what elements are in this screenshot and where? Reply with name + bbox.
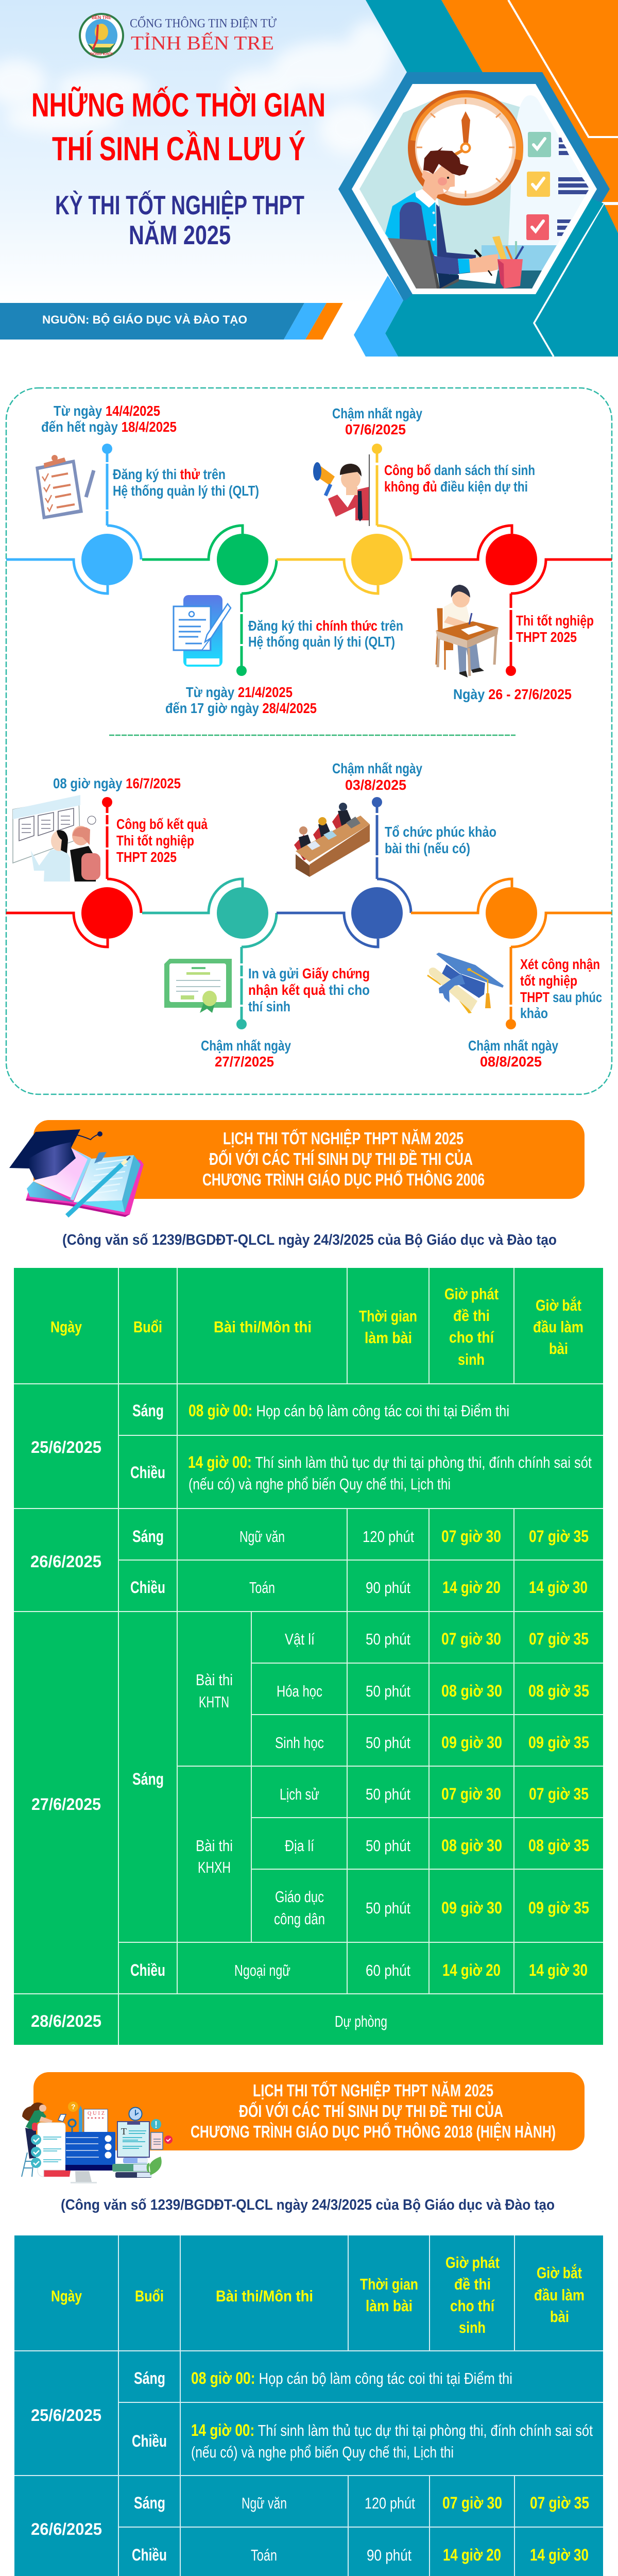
rows 25/6/2025 [31, 2369, 593, 2461]
timeline track: row 2 [6, 797, 612, 1029]
timeline track: row 1 [6, 444, 612, 676]
rows 27/6/2025: Chiều [130, 1961, 165, 1979]
milestone 7 text: bài thi (nếu có) [385, 840, 470, 856]
rows 27/6/2025: 07 giờ 30 [441, 1785, 501, 1803]
milestone 2 text: Hệ thống quản lý thi (QLT) [248, 634, 395, 650]
rows 26/6/2025: Ngữ văn [239, 1528, 285, 1546]
rows 26/6/2025: 14 giờ 20 [442, 1578, 501, 1597]
milestone 3 date: Chậm nhất ngày [332, 405, 422, 421]
milestone 5 text: Công bố kết quả [116, 816, 208, 832]
milestone circle 7 [351, 887, 403, 939]
rows 27/6/2025: 14 giờ 20 [442, 1961, 501, 1979]
table header: Ngày [51, 2287, 82, 2305]
rows 25/6/2025: 25/6/2025 [31, 1438, 101, 1456]
rows 27/6/2025: 50 phút [366, 1734, 410, 1752]
banner: ĐỐI VỚI CÁC THÍ SINH DỰ THI ĐỀ THI CỦA [209, 1149, 473, 1168]
title: NHỮNG MỐC THỜI GIAN [31, 86, 325, 124]
rows 27/6/2025: Bài thi [196, 1837, 233, 1855]
rows 27/6/2025: 27/6/2025 [31, 1795, 101, 1814]
table header: Ngày [50, 1318, 82, 1336]
rows 26/6/2025: Toán [249, 1579, 275, 1597]
title: THÍ SINH CẦN LƯU Ý [52, 130, 305, 167]
panel: header [0, 0, 618, 357]
rows 27/6/2025: KHTN [199, 1693, 229, 1711]
milestone 6 date [201, 1038, 291, 1070]
icon: review board panel [294, 803, 370, 877]
rows 27/6/2025: 14 giờ 30 [529, 1961, 588, 1979]
milestone circle 6 [217, 887, 268, 939]
table header: Giờ bắt [537, 2263, 582, 2282]
rows 27/6/2025: Giáo dục [275, 1888, 324, 1906]
rows 26/6/2025: 120 phút [363, 1528, 414, 1546]
milestone 8 text: khảo [520, 1005, 548, 1021]
milestone 8 text: tốt nghiệp [520, 973, 577, 989]
rows 25/6/2025 [31, 1401, 592, 1493]
banner [33, 2072, 585, 2150]
banner [33, 1120, 585, 1199]
milestone 3 date [332, 405, 422, 437]
milestone 3 text: Công bố danh sách thí sinh [384, 462, 535, 478]
milestone 4 text [516, 613, 594, 645]
milestone 2 date: đến 17 giờ ngày 28/4/2025 [165, 700, 317, 716]
milestone 3 date: 07/6/2025 [345, 421, 406, 437]
milestone circle 2 [217, 534, 268, 585]
rows 26/6/2025: Sáng [134, 2494, 165, 2512]
subtitle: KỲ THI TỐT NGHIỆP THPT [55, 190, 304, 221]
title [31, 86, 325, 167]
milestone circle 8 [486, 887, 537, 939]
rows 26/6/2025: Ngữ văn [242, 2494, 287, 2512]
icon: phone registration form [174, 595, 231, 667]
rows 27/6/2025: Địa lí [285, 1837, 314, 1855]
milestone 1 text [113, 466, 259, 499]
rows 26/6/2025: 120 phút [365, 2494, 415, 2512]
milestone 5 text: Thi tốt nghiệp [116, 833, 194, 849]
rows 26/6/2025: 14 giờ 30 [530, 2546, 589, 2564]
row 28/6/2025 [31, 2012, 387, 2030]
milestone 3 text [384, 462, 535, 495]
rows 27/6/2025: 09 giờ 35 [528, 1899, 589, 1917]
reference note: (Công văn số 1239/BGDĐT-QLCL ngày 24/3/2025 của Bộ Giáo dục và Đào tạo [62, 1232, 557, 1248]
logo: Cổng thông tin điện tử Bến Tre [79, 13, 124, 58]
rows 27/6/2025: Vật lí [285, 1630, 315, 1648]
banner: ĐỐI VỚI CÁC THÍ SINH DỰ THI ĐỀ THI CỦA [239, 2101, 503, 2121]
banner: CHƯƠNG TRÌNH GIÁO DỤC PHỔ THÔNG 2006 [202, 1170, 485, 1189]
milestone 8 date [468, 1038, 558, 1070]
table header: làm bài [365, 1329, 412, 1347]
table header: cho thí [449, 1328, 494, 1346]
banner: LỊCH THI TỐT NGHIỆP THPT NĂM 2025 [253, 2080, 493, 2100]
dashed frame [6, 388, 612, 1094]
rows 26/6/2025: 90 phút [366, 1579, 410, 1597]
rows 26/6/2025: Toán [251, 2546, 277, 2564]
icon: online quiz illustration: QUIZ [88, 2111, 105, 2116]
milestone circle 5 [81, 887, 133, 939]
rows 27/6/2025: 07 giờ 30 [441, 1630, 501, 1648]
milestone circle 1 [81, 534, 133, 585]
rows 27/6/2025: 50 phút [366, 1630, 410, 1648]
table header: bài [550, 2308, 569, 2326]
icon: online quiz illustration: T [121, 2126, 127, 2137]
milestone 5 text [116, 816, 208, 865]
icon: graduation cap and diploma [427, 953, 504, 1013]
rows 27/6/2025: 09 giờ 35 [528, 1733, 589, 1752]
milestone 8 date: 08/8/2025 [480, 1054, 542, 1070]
milestone 1 text: Đăng ký thi thử trên [113, 466, 226, 482]
table header: Giờ phát [444, 1285, 499, 1303]
rows 27/6/2025: 50 phút [366, 1785, 410, 1803]
rows 26/6/2025 [30, 1527, 589, 1597]
rows 27/6/2025: 08 giờ 35 [528, 1682, 589, 1700]
icon: certificate [164, 959, 232, 1013]
table header: Giờ bắt [536, 1296, 581, 1314]
milestone 4 date: Ngày 26 - 27/6/2025 [453, 686, 572, 702]
table header: đề thi [454, 2275, 491, 2293]
rows 26/6/2025: 26/6/2025 [30, 1552, 101, 1571]
rows 27/6/2025: Hóa học [277, 1682, 322, 1700]
row 28/6/2025: Dự phòng [335, 2012, 387, 2030]
rows 27/6/2025: Sáng [132, 1770, 164, 1788]
milestone 1 date: Từ ngày 14/4/2025 [54, 403, 160, 419]
rows 27/6/2025: công dân [274, 1910, 325, 1928]
rows 26/6/2025: 14 giờ 20 [443, 2546, 501, 2564]
rows 27/6/2025: 08 giờ 30 [441, 1682, 502, 1700]
rows 27/6/2025: 08 giờ 30 [441, 1836, 502, 1855]
rows 27/6/2025: 50 phút [366, 1837, 410, 1855]
source bar [0, 303, 343, 340]
rows 27/6/2025: 50 phút [366, 1682, 410, 1700]
logo: Cổng thông tin điện tử Bến Tre: BẾN TRE [92, 15, 111, 20]
subtitle: NĂM 2025 [129, 221, 231, 250]
table header: bài [549, 1340, 568, 1358]
rows 25/6/2025: 08 giờ 00: Họp cán bộ làm công tác coi thi tại Điểm thi [191, 2369, 512, 2387]
rows 27/6/2025: 50 phút [366, 1899, 410, 1917]
milestone circle 4 [486, 534, 537, 585]
banner: LỊCH THI TỐT NGHIỆP THPT NĂM 2025 [223, 1128, 464, 1148]
rows 26/6/2025: 07 giờ 35 [529, 1527, 589, 1546]
milestone 7 text: Tổ chức phúc khảo [385, 824, 496, 840]
milestone 8 date: Chậm nhất ngày [468, 1038, 558, 1054]
icon: online quiz illustration: ? [71, 2103, 76, 2111]
rows 26/6/2025: 07 giờ 30 [442, 2494, 502, 2512]
icon: clipboard checklist [36, 455, 94, 519]
portal name: TỈNH BẾN TRE [131, 32, 274, 54]
rows 27/6/2025: Lịch sử [280, 1785, 319, 1803]
rows 25/6/2025: 08 giờ 00: Họp cán bộ làm công tác coi thi tại Điểm thi [188, 1401, 509, 1420]
rows 27/6/2025: 09 giờ 30 [441, 1899, 502, 1917]
table header: Buổi [135, 2287, 164, 2305]
panel: timeline [6, 388, 612, 1094]
milestone 8 text [520, 956, 602, 1021]
milestone circle 3 [351, 534, 403, 585]
portal name [130, 16, 277, 54]
reference note: (Công văn số 1239/BGDĐT-QLCL ngày 24/3/2025 của Bộ Giáo dục và Đào tạo [61, 2197, 555, 2213]
rows 27/6/2025: Ngoại ngữ [234, 1961, 290, 1979]
table: exam schedule 2018 programme [14, 2235, 603, 2576]
rows 27/6/2025 [31, 1630, 589, 1979]
milestone 6 text: thí sinh [248, 998, 290, 1014]
icon: book and graduation cap [9, 1129, 144, 1217]
rows 27/6/2025: 07 giờ 35 [529, 1630, 589, 1648]
rows 27/6/2025: 09 giờ 30 [441, 1733, 502, 1752]
rows 26/6/2025: 90 phút [367, 2546, 411, 2564]
milestone 3 text: không đủ điều kiện dự thi [384, 479, 528, 495]
rows 26/6/2025: Chiều [130, 1578, 165, 1597]
rows 26/6/2025: 07 giờ 35 [530, 2494, 589, 2512]
rows 27/6/2025: KHXH [198, 1858, 231, 1876]
rows 27/6/2025: 07 giờ 35 [529, 1785, 589, 1803]
logo: Cổng thông tin điện tử Bến Tre: ĐỒNG KHỞI [90, 51, 113, 56]
table header: đầu làm [534, 2286, 585, 2304]
milestone 7 date: 03/8/2025 [345, 777, 406, 793]
milestone 8 text: THPT sau phúc [520, 989, 602, 1005]
milestone 2 date [165, 684, 317, 716]
milestone 4 text: Thi tốt nghiệp [516, 613, 594, 629]
rows 27/6/2025: Sinh học [275, 1734, 324, 1752]
rows 25/6/2025: Chiều [132, 2432, 167, 2450]
milestone 1 date [41, 403, 177, 435]
hexagon illustration: student and clock [338, 72, 610, 304]
table header: Bài thi/Môn thi [214, 1318, 312, 1336]
portal name: CỔNG THÔNG TIN ĐIỆN TỬ [130, 16, 277, 30]
milestone 1 date: đến hết ngày 18/4/2025 [41, 419, 177, 435]
section divider [109, 735, 516, 736]
milestone 5 date: 08 giờ ngày 16/7/2025 [53, 775, 181, 791]
table header: sinh [459, 2318, 486, 2336]
milestone 6 text [248, 965, 370, 1014]
rows 26/6/2025 [31, 2494, 589, 2564]
rows 26/6/2025: 14 giờ 30 [529, 1578, 588, 1597]
milestone 6 date: 27/7/2025 [215, 1054, 274, 1070]
milestone 8 text: Xét công nhận [520, 956, 600, 972]
table header: Thời gian [359, 1307, 417, 1325]
rows 25/6/2025: Sáng [134, 2369, 165, 2387]
rows 26/6/2025: Sáng [132, 1527, 164, 1546]
icon: person with megaphone [313, 454, 369, 526]
rows 25/6/2025: Chiều [130, 1463, 165, 1482]
decorative shapes right [354, 0, 618, 357]
table header: đầu làm [533, 1318, 583, 1336]
row 28/6/2025: 28/6/2025 [31, 2012, 101, 2030]
table header: cho thí [450, 2297, 495, 2315]
panel: schedule 2006 programme [9, 1120, 603, 2045]
icon: online quiz illustration [22, 2102, 173, 2183]
table header: đề thi [453, 1307, 490, 1325]
table header: Giờ phát [445, 2253, 500, 2272]
milestone 6 text: In và gửi Giấy chứng [248, 965, 370, 981]
rows 26/6/2025: Chiều [132, 2546, 167, 2564]
milestone 5 text: THPT 2025 [116, 849, 177, 865]
rows 27/6/2025: 08 giờ 35 [528, 1836, 589, 1855]
milestone 1 text: Hệ thống quản lý thi (QLT) [113, 483, 259, 499]
rows 27/6/2025: Bài thi [196, 1671, 233, 1689]
milestone 6 text: nhận kết quả thi cho [248, 982, 370, 998]
rows 26/6/2025: 26/6/2025 [31, 2520, 102, 2538]
rows 27/6/2025: 60 phút [366, 1961, 410, 1979]
milestone 7 date: Chậm nhất ngày [332, 760, 422, 776]
icon: student at exam desk [436, 585, 499, 677]
table header [51, 2253, 585, 2336]
table: exam schedule 2006 programme [14, 1268, 603, 2045]
milestone 7 text [385, 824, 496, 856]
rows 26/6/2025: 07 giờ 30 [441, 1527, 501, 1546]
milestone 4 text: THPT 2025 [516, 629, 577, 645]
rows 25/6/2025: (nếu có) và nghe phổ biến Quy chế thi, Lịch thi [188, 1475, 451, 1493]
milestone 6 date: Chậm nhất ngày [201, 1038, 291, 1054]
milestone 2 text [248, 618, 403, 650]
table header: Buổi [133, 1318, 162, 1336]
icon: students reading results board [13, 795, 100, 882]
source bar: NGUỒN: BỘ GIÁO DỤC VÀ ĐÀO TẠO [42, 313, 247, 326]
table header: Thời gian [360, 2275, 418, 2293]
sky background [0, 0, 618, 357]
table header: Bài thi/Môn thi [216, 2287, 313, 2305]
table header: sinh [458, 1350, 485, 1368]
rows 25/6/2025: 25/6/2025 [31, 2406, 101, 2425]
milestone 2 text: Đăng ký thi chính thức trên [248, 618, 403, 634]
table header: làm bài [366, 2297, 413, 2315]
icon: online quiz illustration: ! [154, 2120, 158, 2130]
rows 25/6/2025: (nếu có) và nghe phổ biến Quy chế thi, Lịch thi [191, 2443, 454, 2461]
table header [50, 1285, 583, 1368]
subtitle [55, 190, 304, 250]
milestone 2 date: Từ ngày 21/4/2025 [186, 684, 293, 700]
rows 25/6/2025: Sáng [132, 1401, 164, 1420]
milestone 7 date [332, 760, 422, 793]
panel: schedule 2018 programme [14, 2072, 603, 2576]
